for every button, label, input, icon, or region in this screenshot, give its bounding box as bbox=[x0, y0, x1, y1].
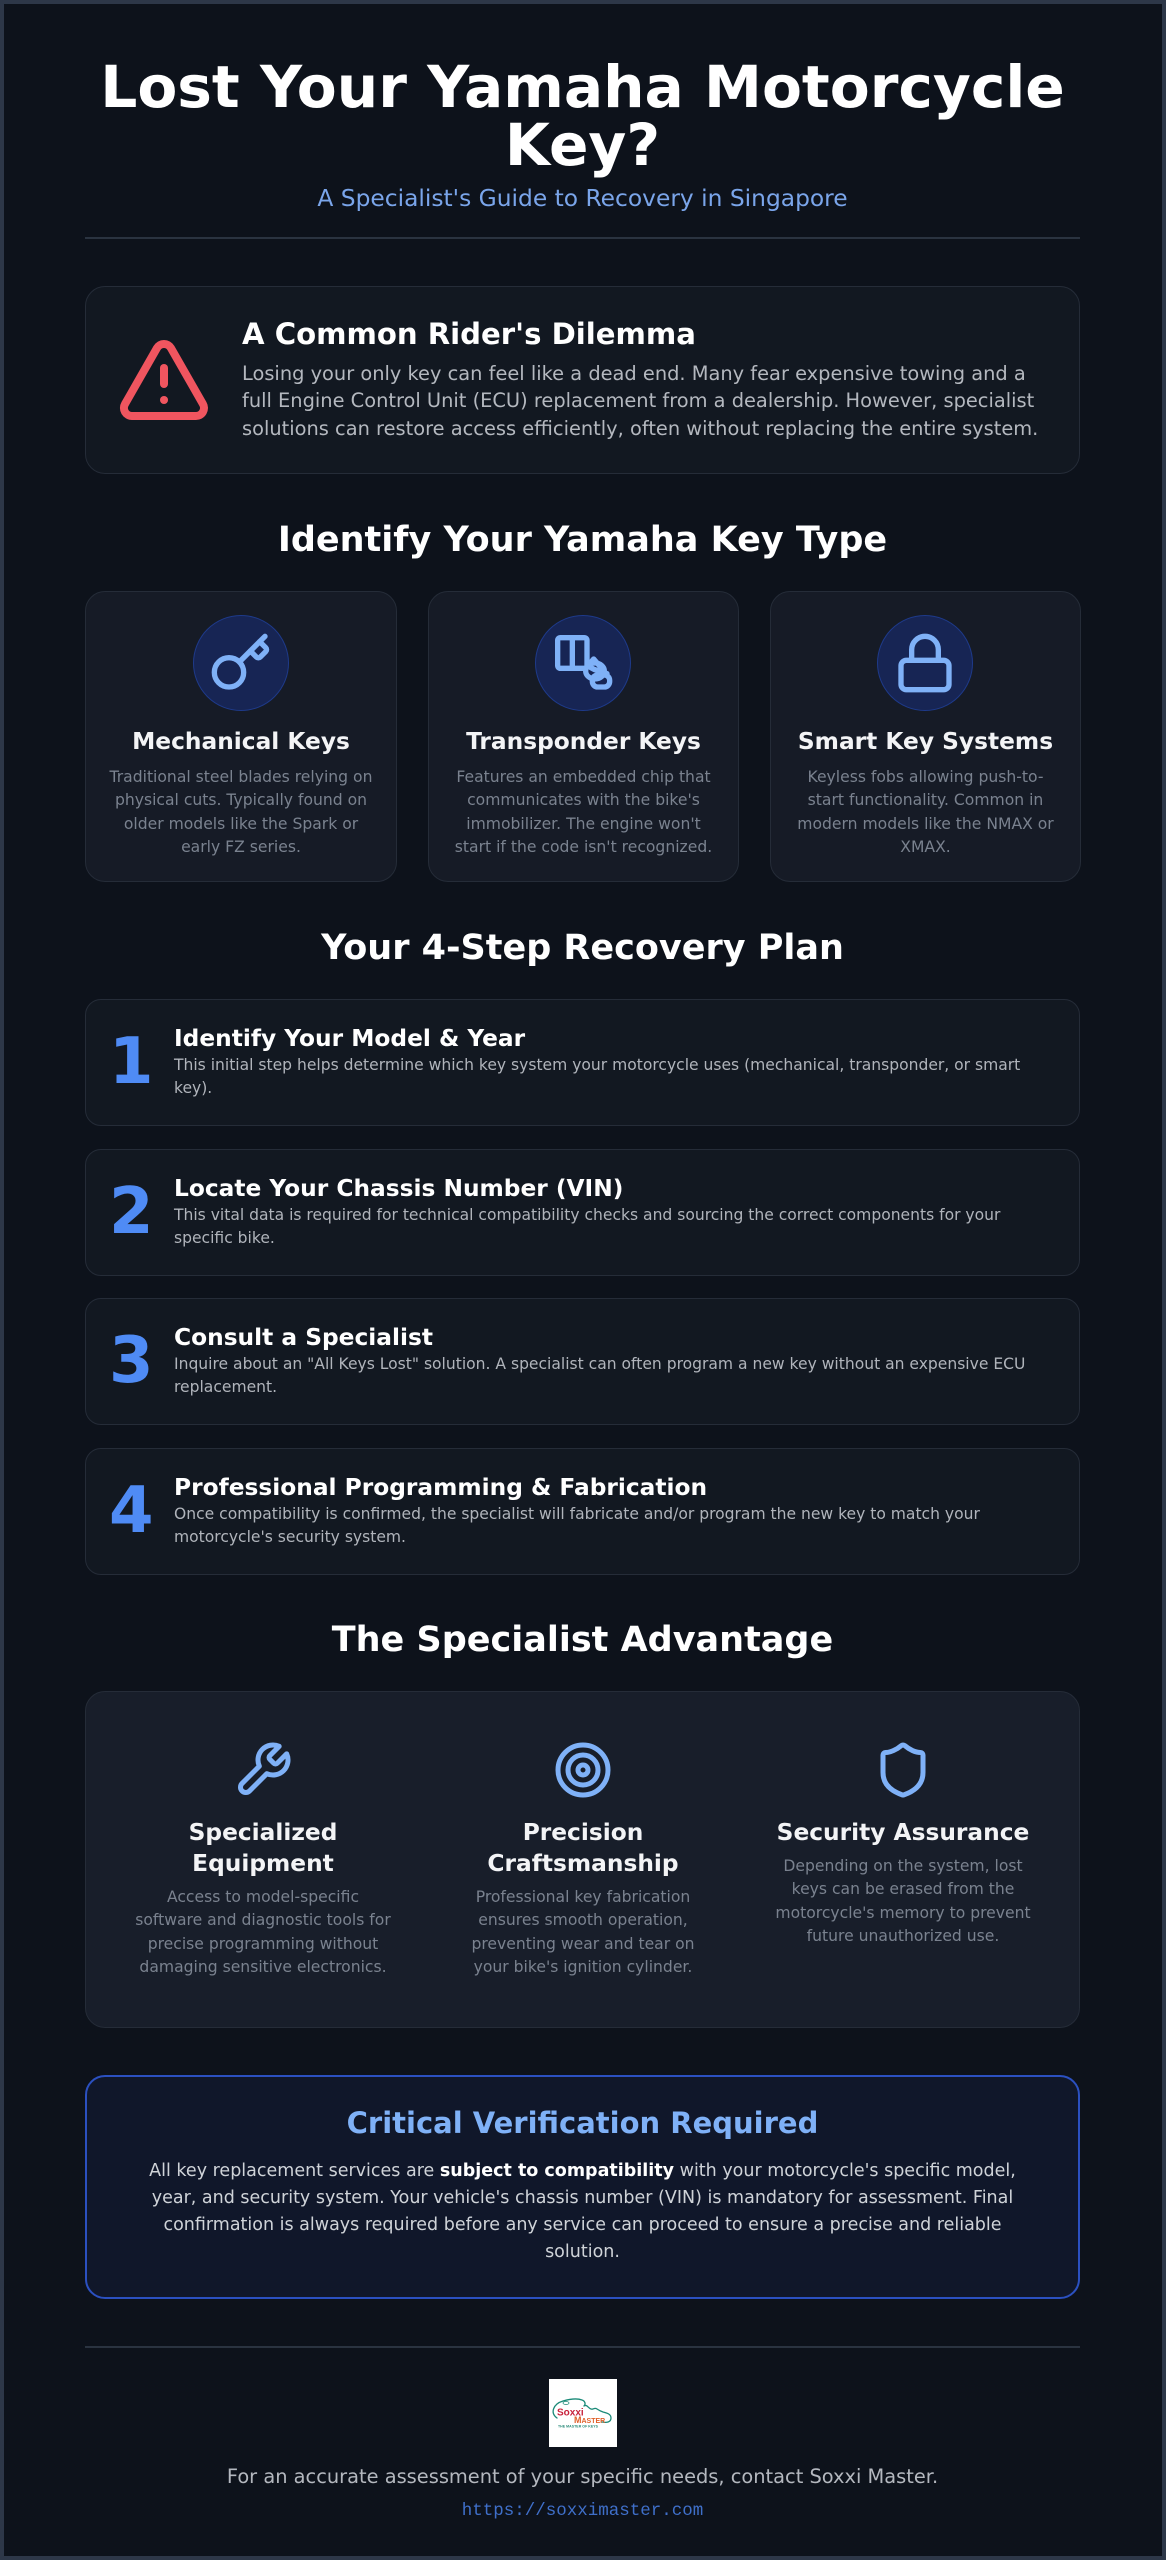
dilemma text: solutions can restore access efficiently, often without replacing the entire system. bbox=[242, 417, 1038, 440]
step 3 bbox=[85, 1298, 1080, 1425]
advantage title bbox=[189, 1818, 337, 1876]
step description: This vital data is required for technical compatibility checks and sourcing the correct components for your bbox=[174, 1206, 1000, 1224]
step description: replacement. bbox=[174, 1378, 277, 1396]
step title: Consult a Specialist bbox=[174, 1324, 433, 1351]
advantage description: damaging sensitive electronics. bbox=[139, 1958, 387, 1976]
card description: immobilizer. The engine won't bbox=[466, 815, 701, 833]
heading: specialist advantage: The Specialist Advantage bbox=[332, 1620, 833, 1660]
step 2 bbox=[85, 1148, 1080, 1276]
footer link: https://soxximaster.com bbox=[462, 2501, 703, 2521]
subtitle: A Specialist's Guide to Recovery in Singapore bbox=[317, 184, 848, 212]
callout text: confirmation is always required before any service can proceed to ensure a precise and reliable bbox=[163, 2215, 1002, 2235]
advantage description: precise programming without bbox=[148, 1935, 378, 1953]
advantage description: motorcycle's memory to prevent bbox=[775, 1904, 1031, 1922]
step description: Inquire about an "All Keys Lost" solution. A specialist can often program a new key without an expensive ECU bbox=[174, 1355, 1025, 1373]
panel: smart key systems bbox=[770, 591, 1081, 882]
panel: common rider's dilemma bbox=[85, 286, 1080, 474]
step description bbox=[174, 1504, 980, 1546]
dilemma text bbox=[242, 362, 1038, 440]
dilemma heading: A Common Rider's Dilemma bbox=[242, 317, 696, 351]
step title: Identify Your Model & Year bbox=[174, 1025, 525, 1052]
step description: Once compatibility is confirmed, the specialist will fabricate and/or program the new key to match your bbox=[174, 1504, 980, 1522]
panel: specialist advantage bbox=[85, 1691, 1080, 2028]
step title: Locate Your Chassis Number (VIN) bbox=[174, 1174, 623, 1202]
advantage description: Depending on the system, lost bbox=[783, 1857, 1023, 1875]
card description: Keyless fobs allowing push-to- bbox=[808, 768, 1044, 786]
icon: lock bbox=[877, 615, 973, 711]
card description: older models like the Spark or bbox=[124, 815, 358, 833]
logo: Soxxi Master: MASTER bbox=[574, 2415, 605, 2425]
step description: This initial step helps determine which key system your motorcycle uses (mechanical, transponder, or smart bbox=[174, 1056, 1020, 1074]
step description bbox=[174, 1355, 1025, 1396]
callout: critical verification bbox=[85, 2074, 1080, 2298]
step title: Professional Programming & Fabrication bbox=[174, 1474, 707, 1500]
icon: shield bbox=[880, 1742, 926, 1798]
callout text: solution. bbox=[545, 2242, 620, 2262]
icon: key bbox=[193, 615, 289, 711]
advantage title bbox=[487, 1818, 679, 1876]
advantage description: Access to model-specific bbox=[167, 1888, 359, 1906]
step number: 2 bbox=[109, 1174, 154, 1248]
card description: XMAX. bbox=[900, 838, 951, 856]
advantage title: Security Assurance bbox=[777, 1818, 1029, 1846]
card title: Transponder Keys bbox=[466, 728, 701, 755]
advantage title: Precision bbox=[523, 1818, 643, 1846]
card description bbox=[109, 768, 372, 856]
card title: Mechanical Keys bbox=[132, 728, 350, 755]
callout text: All key replacement services are subject to compatibility with your motorcycle's specific model, bbox=[149, 2160, 1016, 2180]
step 4 bbox=[85, 1448, 1080, 1574]
advantage description: keys can be erased from the bbox=[792, 1880, 1014, 1898]
step number: 1 bbox=[109, 1025, 154, 1099]
advantage description: software and diagnostic tools for bbox=[135, 1911, 391, 1929]
callout text bbox=[149, 2160, 1016, 2262]
card description: modern models like the NMAX or bbox=[797, 815, 1054, 833]
title: Lost Your Yamaha Motorcycle bbox=[100, 53, 1065, 121]
advantage description: your bike's ignition cylinder. bbox=[474, 1958, 692, 1976]
logo: Soxxi Master: Soxxi bbox=[557, 2408, 584, 2418]
heading: recovery plan: Your 4-Step Recovery Plan bbox=[321, 928, 844, 968]
heading: key types: Identify Your Yamaha Key Type bbox=[278, 520, 887, 560]
card title: Smart Key Systems bbox=[798, 728, 1053, 755]
step number: 4 bbox=[109, 1474, 154, 1548]
card description: start if the code isn't recognized. bbox=[455, 838, 712, 856]
advantage title: Specialized bbox=[189, 1818, 337, 1846]
icon: chip key bbox=[535, 615, 631, 711]
advantage description: future unauthorized use. bbox=[807, 1927, 999, 1945]
card description bbox=[455, 768, 712, 856]
dilemma text: Losing your only key can feel like a dead end. Many fear expensive towing and a bbox=[242, 362, 1026, 385]
logo: Soxxi Master: THE MASTER OF KEYS bbox=[558, 2424, 599, 2428]
card description: communicates with the bike's bbox=[467, 791, 700, 809]
advantage description: Professional key fabrication bbox=[476, 1888, 690, 1906]
advantage description bbox=[775, 1857, 1031, 1945]
step number: 3 bbox=[109, 1324, 154, 1398]
step description: motorcycle's security system. bbox=[174, 1528, 406, 1546]
icon: target bbox=[556, 1742, 610, 1798]
icon: wrench bbox=[238, 1742, 290, 1795]
logo: Soxxi Master bbox=[549, 2379, 617, 2447]
title bbox=[100, 53, 1065, 179]
step description bbox=[174, 1056, 1020, 1097]
advantage description bbox=[135, 1888, 391, 1976]
footer text: For an accurate assessment of your specific needs, contact Soxxi Master. bbox=[227, 2465, 938, 2488]
card description: Features an embedded chip that bbox=[456, 768, 711, 786]
advantage title: Craftsmanship bbox=[487, 1850, 679, 1876]
advantage description: preventing wear and tear on bbox=[471, 1935, 695, 1953]
title: Key? bbox=[505, 111, 660, 179]
step description bbox=[174, 1206, 1000, 1247]
dilemma text: full Engine Control Unit (ECU) replacement from a dealership. However, specialist bbox=[242, 389, 1034, 412]
card description: Traditional steel blades relying on bbox=[110, 768, 372, 786]
advantage description bbox=[471, 1888, 695, 1976]
panel: transponder keys bbox=[428, 591, 739, 882]
icon: warning triangle bbox=[120, 340, 208, 420]
panel: mechanical keys bbox=[85, 591, 397, 882]
card description: start functionality. Common in bbox=[808, 791, 1043, 809]
advantage description: ensures smooth operation, bbox=[478, 1911, 688, 1929]
callout text: year, and security system. Your vehicle's chassis number (VIN) is mandatory for assessment. Final bbox=[152, 2188, 1013, 2208]
advantage title: Equipment bbox=[192, 1850, 334, 1876]
card description: physical cuts. Typically found on bbox=[115, 791, 367, 809]
step description: key). bbox=[174, 1079, 212, 1097]
callout heading: Critical Verification Required bbox=[347, 2106, 818, 2140]
step description: specific bike. bbox=[174, 1229, 275, 1247]
card description: early FZ series. bbox=[181, 838, 301, 856]
card description bbox=[797, 768, 1054, 856]
step 1 bbox=[85, 999, 1080, 1126]
